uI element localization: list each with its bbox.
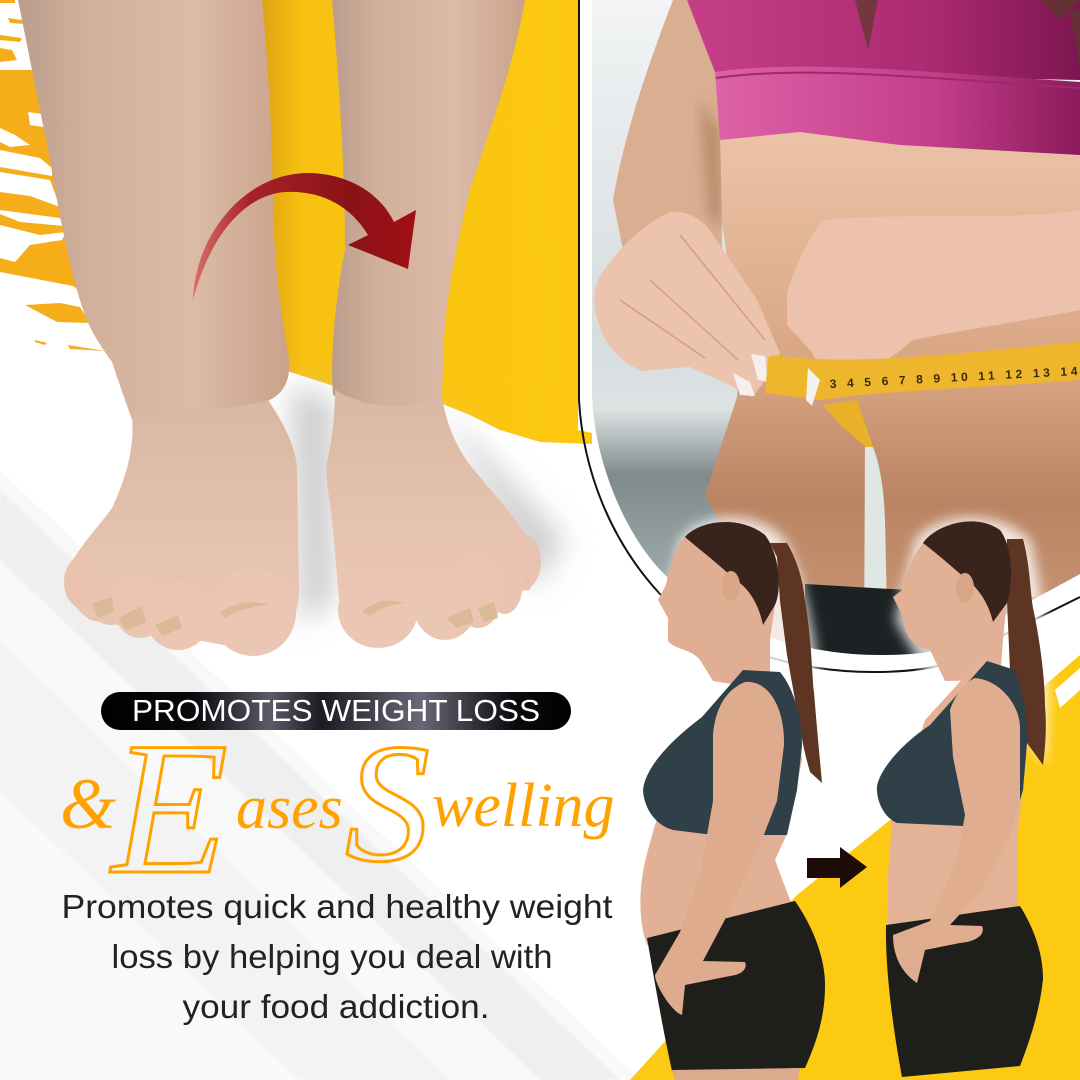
sports top: [643, 670, 802, 835]
head and neck: [893, 521, 1007, 681]
dark shorts at waist: [805, 584, 1036, 655]
ear: [956, 573, 974, 603]
script headline: &: [60, 764, 116, 844]
script headline: welling: [432, 772, 615, 840]
body text: Promotes quick and healthy weight: [62, 888, 612, 925]
halo: [660, 518, 823, 780]
ponytail: [1007, 539, 1046, 765]
white nails: [733, 354, 768, 396]
arm and hand: [893, 678, 1020, 983]
torso: [887, 660, 1027, 928]
right toes: [503, 534, 541, 590]
torso: [705, 130, 1080, 660]
blurred gym background: [592, 0, 1080, 660]
right leg: [332, 0, 525, 411]
arrow between before and after: [807, 847, 867, 888]
ponytail: [770, 543, 822, 783]
body text: [62, 888, 612, 1025]
script headline: S: [345, 709, 430, 897]
measuring tape hanging: [823, 400, 873, 447]
leg below shorts: [672, 1068, 800, 1080]
left hand: [594, 212, 780, 397]
body text: your food addiction.: [182, 988, 490, 1025]
measuring tape horizontal: [765, 342, 1080, 400]
torso: [640, 670, 802, 945]
shorts: [886, 906, 1043, 1077]
script headline: [60, 704, 615, 914]
foot shadows: [290, 385, 565, 625]
hair: [923, 521, 1011, 622]
hair: [685, 522, 779, 625]
tape buckle: [806, 368, 820, 406]
loose hair strands: [855, 0, 1080, 70]
shorts: [647, 901, 825, 1071]
person before: side view with larger belly: [640, 518, 825, 1080]
left foot: [65, 400, 299, 650]
photo: swollen legs and feet: [18, 0, 565, 656]
left leg: [18, 0, 289, 428]
right foot: [327, 390, 538, 610]
headline pill: PROMOTES WEIGHT LOSS: [132, 693, 540, 728]
white brush streaks: [0, 112, 66, 262]
head and neck: [658, 521, 777, 690]
curved black frame line: [579, 0, 1080, 672]
orange flecks: [0, 0, 24, 62]
curved red arrow between legs: [193, 173, 416, 300]
left toes: [64, 556, 100, 608]
yellow brush panel bottom right: [630, 655, 1080, 1080]
arm and hand: [655, 682, 784, 1015]
toenails: [92, 597, 498, 636]
halo: [895, 518, 1048, 765]
photo panel: measuring waist: [579, 0, 1080, 672]
script headline: ases: [236, 774, 343, 842]
body text: loss by helping you deal with: [112, 938, 552, 975]
script headline: E: [109, 704, 228, 914]
ear: [722, 571, 740, 601]
tape numbers: 3 4 5 6 7 8 9 10 11 12 13 14: [829, 364, 1078, 391]
right hand and forearm: [787, 210, 1080, 360]
arm behind: [613, 0, 722, 260]
pink sports top: [687, 0, 1080, 80]
sports top: [877, 661, 1027, 826]
person after: side view with slimmer belly: [877, 518, 1048, 1077]
yellow brush panel top left: [0, 0, 592, 444]
